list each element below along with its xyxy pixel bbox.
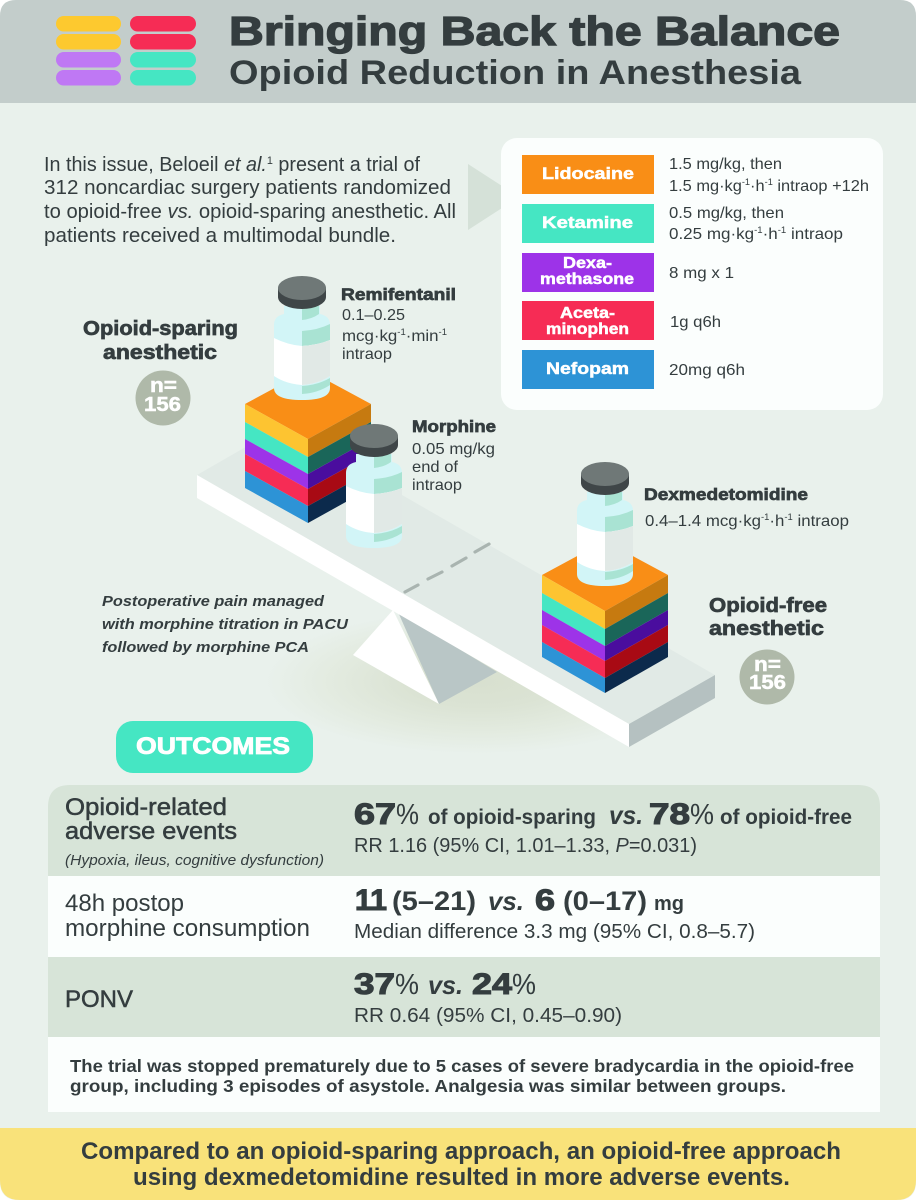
conclusion banner: Compared to an opioid-sparing approach, an opioid-free approach (81, 1138, 841, 1165)
row: opioid-related adverse events: Opioid-related (65, 794, 227, 821)
vial: dexmedetomidine (577, 462, 633, 586)
row: 48h postop morphine consumption (48, 876, 880, 957)
drug: dexamethasone (522, 253, 734, 292)
intro text: 312 noncardiac surgery patients randomized (44, 177, 451, 199)
row: PONV: % (512, 969, 536, 1001)
intro text: 1 (267, 155, 273, 167)
postoperative pain note (102, 593, 349, 656)
label: opioid-sparing anesthetic (83, 318, 238, 426)
row: opioid-related adverse events: vs. (609, 800, 643, 830)
label: morphine: Morphine (412, 417, 496, 436)
row: trial stopped note (48, 1037, 880, 1112)
label: opioid-free anesthetic (709, 595, 827, 704)
row: opioid-related adverse events: adverse events (65, 818, 237, 845)
badge: n=156 sparing: n= (150, 375, 177, 397)
row: opioid-related adverse events: 67 (354, 798, 396, 831)
row: PONV: 37 (354, 968, 395, 1001)
title: Bringing Back the Balance (229, 8, 840, 54)
label: dexmedetomidine: ·h (769, 513, 784, 530)
row: PONV (48, 957, 880, 1037)
scale illustration (197, 276, 715, 754)
row: 48h postop morphine consumption: mg (654, 893, 684, 915)
drug: nefopam: 20mg q6h (669, 362, 745, 379)
intro text: patients received a multimodal bundle. (44, 225, 396, 247)
arrow to bundle panel (468, 164, 519, 230)
conclusion banner (0, 1128, 916, 1200)
label: dexmedetomidine: -1 (761, 512, 769, 522)
row: trial stopped note: The trial was stopped prematurely due to 5 cases of severe bradycardia in the opioid-free (70, 1056, 854, 1076)
scale shadow (265, 610, 695, 754)
row: 48h postop morphine consumption: morphine consumption (65, 915, 310, 942)
label: remifentanil: -1 (439, 327, 447, 337)
row: opioid-related adverse events: RR 1.16 (95% CI, 1.01–1.33, P=0.031) (354, 835, 697, 857)
vial: remifentanil (274, 276, 330, 400)
row: PONV: vs. (428, 970, 463, 1000)
label: dexmedetomidine (644, 485, 849, 530)
label: morphine: 0.05 mg/kg (412, 441, 495, 458)
label: dexmedetomidine: 0.4–1.4 mcg·kg (645, 513, 755, 530)
label: remifentanil (341, 285, 456, 363)
label: dexmedetomidine: Dexmedetomidine (644, 485, 808, 504)
label: opioid-free anesthetic: Opioid-free (709, 595, 827, 617)
row: trial stopped note: group, including 3 episodes of asystole. Analgesia was similar between groups. (70, 1076, 786, 1096)
drug: lidocaine: ·h (750, 178, 765, 195)
label: opioid-sparing anesthetic: anesthetic (103, 342, 217, 364)
badge: n=156 free: n= (754, 654, 781, 676)
drug: acetaminophen: 1g q6h (670, 314, 721, 331)
drug: acetaminophen: minophen (546, 321, 629, 338)
conclusion banner: using dexmedetomidine resulted in more adverse events. (133, 1164, 790, 1191)
drug: lidocaine: -1 (742, 177, 750, 187)
intro text: In this issue, Beloeil et al. (44, 154, 267, 176)
subtitle: Opioid Reduction in Anesthesia (229, 54, 802, 92)
outcomes heading: OUTCOMES (136, 733, 290, 760)
row: 48h postop morphine consumption: 48h postop (65, 890, 184, 917)
label: dexmedetomidine: intraop (793, 513, 849, 530)
badge: n=156 free: 156 (749, 672, 786, 694)
drug: ketamine: Ketamine (542, 213, 633, 232)
drug: lidocaine: 1.5 mg·kg (669, 178, 740, 195)
header band (0, 0, 916, 103)
label: morphine: end of (412, 459, 459, 476)
row: opioid-related adverse events (48, 785, 880, 876)
drug: ketamine: ·h (763, 226, 778, 243)
label: remifentanil: ·min (406, 328, 439, 345)
drug: ketamine: -1 (778, 225, 786, 235)
panel: multimodal bundle (501, 138, 883, 410)
label: morphine (412, 417, 496, 494)
row: opioid-related adverse events: of opioid-sparing (428, 806, 596, 829)
postoperative pain note: Postoperative pain managed (102, 593, 325, 610)
drug: lidocaine: Lidocaine (542, 164, 634, 183)
row: opioid-related adverse events: (Hypoxia, ileus, cognitive dysfunction) (65, 853, 324, 869)
badge: n=156 sparing (136, 370, 190, 426)
row: opioid-related adverse events: of opioid-free (720, 806, 852, 829)
postoperative pain note: followed by morphine PCA (102, 639, 309, 656)
drug: ketamine: 0.25 mg·kg (669, 226, 749, 243)
vial: morphine (346, 424, 402, 548)
row: PONV: PONV (65, 986, 133, 1013)
label: remifentanil: 0.1–0.25 (342, 307, 405, 324)
label: opioid-free anesthetic: anesthetic (709, 618, 824, 640)
row: 48h postop morphine consumption: 11 (355, 884, 387, 917)
label: remifentanil: -1 (397, 327, 406, 337)
bundle stack: opioid-sparing (245, 370, 371, 523)
drug: ketamine (522, 204, 843, 243)
drug: nefopam (522, 350, 745, 389)
row: 48h postop morphine consumption: (5–21) (392, 886, 476, 916)
drug: dexamethasone: 8 mg x 1 (669, 265, 734, 282)
drug: ketamine: intraop (786, 226, 843, 243)
postoperative pain note: with morphine titration in PACU (102, 616, 349, 633)
label: remifentanil: Remifentanil (341, 285, 456, 304)
drug: acetaminophen: Aceta- (560, 305, 615, 322)
label: morphine: intraop (412, 477, 462, 494)
row: PONV: 24 (472, 968, 512, 1001)
row: opioid-related adverse events: % (690, 799, 714, 831)
badge: n=156 free (740, 650, 794, 704)
intro text (44, 154, 456, 247)
row: 48h postop morphine consumption: vs. (488, 886, 524, 916)
fulcrum (353, 610, 497, 704)
row: opioid-related adverse events: % (396, 799, 419, 831)
icon: coloured pills (56, 16, 196, 86)
drug: dexamethasone: methasone (540, 271, 634, 288)
drug: acetaminophen (522, 301, 721, 340)
intro text: present a trial of (273, 154, 420, 176)
drug: dexamethasone: Dexa- (563, 255, 612, 272)
row: PONV: % (395, 969, 419, 1001)
drug: ketamine: 0.5 mg/kg, then (669, 205, 784, 222)
drug: lidocaine: 1.5 mg/kg, then (669, 156, 782, 173)
badge: n=156 sparing: 156 (144, 394, 181, 416)
row: opioid-related adverse events: 78 (649, 798, 690, 831)
label: remifentanil: intraop (342, 346, 392, 363)
bundle stack: opioid-free (542, 541, 668, 693)
row: PONV: RR 0.64 (95% CI, 0.45–0.90) (354, 1005, 622, 1027)
outcomes table (48, 785, 880, 1112)
row: 48h postop morphine consumption: (0–17) (563, 886, 647, 916)
row: 48h postop morphine consumption: 6 (535, 884, 555, 917)
label: dexmedetomidine: -1 (784, 512, 793, 522)
drug: lidocaine: intraop +12h (773, 178, 869, 195)
outcomes heading (116, 721, 313, 773)
drug: lidocaine (522, 155, 869, 195)
drug: nefopam: Nefopam (546, 359, 629, 378)
row: 48h postop morphine consumption: Median difference 3.3 mg (95% CI, 0.8–5.7) (354, 921, 755, 943)
label: opioid-sparing anesthetic: Opioid-sparing (83, 318, 238, 340)
label: remifentanil: mcg·kg (342, 328, 394, 345)
drug: lidocaine: -1 (765, 177, 773, 187)
drug: ketamine: -1 (754, 225, 763, 235)
intro text: to opioid-free vs. opioid-sparing anesthetic. All (44, 201, 456, 223)
beam (197, 426, 715, 747)
